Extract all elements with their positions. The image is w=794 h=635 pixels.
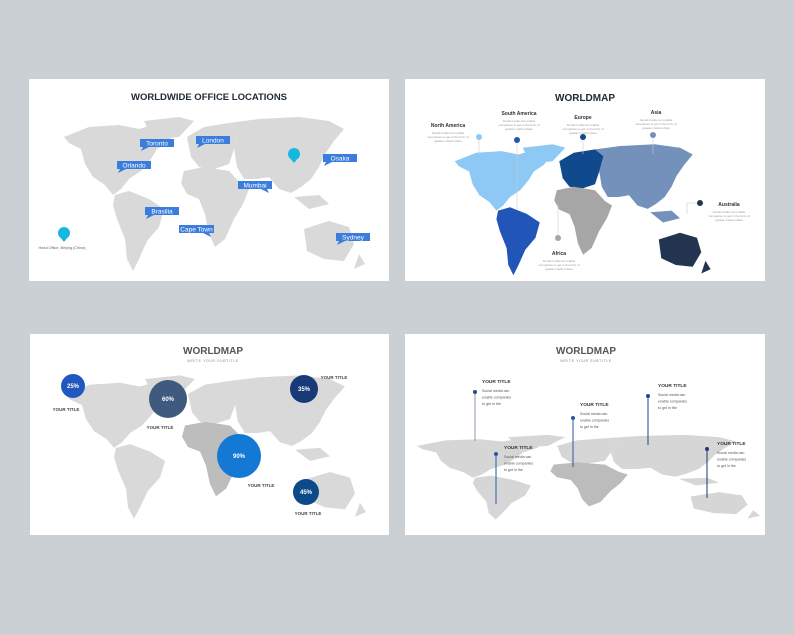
region descriptions: companies to get in the form of bbox=[427, 135, 469, 139]
gray world map bbox=[65, 375, 366, 519]
percentage circles bbox=[61, 374, 319, 505]
subtitle: WRITE YOUR SUBTITLE bbox=[187, 359, 239, 363]
pin titles bbox=[482, 379, 746, 451]
title: worldwide office locations: WORLDWIDE OFFICE LOCATIONS bbox=[131, 92, 287, 103]
pin descriptions: Social media can bbox=[482, 389, 509, 393]
pin descriptions: to get in the bbox=[658, 406, 677, 410]
pins bbox=[473, 390, 709, 504]
region descriptions: greater market share bbox=[642, 126, 670, 130]
region descriptions: companies to get in the form of bbox=[708, 214, 750, 218]
head office caption: Head Office, Beijing (China) bbox=[38, 246, 86, 250]
colored world map bbox=[455, 144, 711, 275]
pin descriptions: Social media can bbox=[580, 412, 607, 416]
pin descriptions: to get in the bbox=[580, 425, 599, 429]
office labels: Osaka bbox=[331, 156, 350, 162]
region descriptions: greater market share bbox=[715, 218, 743, 222]
office labels bbox=[117, 136, 370, 245]
region labels: Europe bbox=[574, 115, 592, 121]
pin descriptions: to get in the bbox=[504, 468, 523, 472]
region labels bbox=[431, 110, 740, 257]
region labels: South America bbox=[501, 111, 537, 117]
pin titles: YOUR TITLE bbox=[580, 402, 609, 408]
pin descriptions: enable companies bbox=[658, 400, 687, 404]
panel: worldmap percentages bbox=[30, 334, 389, 535]
region labels: Australia bbox=[718, 202, 740, 208]
region descriptions: Social media can enable bbox=[543, 259, 576, 263]
pin descriptions: to get in the bbox=[717, 464, 736, 468]
pin descriptions: enable companies bbox=[580, 418, 609, 422]
region descriptions: companies to get in the form of bbox=[562, 127, 604, 131]
office labels: Orlando bbox=[122, 162, 146, 170]
region descriptions: Social media can enable bbox=[503, 119, 536, 123]
pin titles: YOUR TITLE bbox=[482, 379, 511, 385]
pin descriptions: enable companies bbox=[717, 458, 746, 462]
office labels: London bbox=[202, 138, 224, 144]
office labels: Brasilia bbox=[151, 208, 173, 216]
panel: worldwide office locations bbox=[29, 79, 389, 281]
region labels: Africa bbox=[552, 251, 566, 257]
office labels: Sydney bbox=[342, 234, 365, 242]
region descriptions: Social media can enable bbox=[567, 123, 600, 127]
pin descriptions bbox=[482, 389, 746, 472]
pin descriptions: enable companies bbox=[482, 396, 511, 400]
title: WORLDMAP bbox=[183, 346, 243, 357]
region descriptions: greater market share bbox=[569, 131, 597, 135]
pin descriptions: Social media can bbox=[717, 451, 744, 455]
icon: beijing pin bbox=[288, 148, 300, 163]
region descriptions bbox=[427, 118, 750, 271]
region descriptions: greater market share bbox=[505, 127, 533, 131]
pin titles: YOUR TITLE bbox=[717, 441, 746, 447]
title: WORLDMAP bbox=[556, 346, 616, 357]
percentage circles: 90% bbox=[233, 454, 246, 460]
pin descriptions: Social media can bbox=[504, 455, 531, 459]
connector lines bbox=[479, 135, 700, 238]
region descriptions: companies to get in the form of bbox=[538, 263, 580, 267]
office labels: Cape Town bbox=[180, 226, 213, 234]
region descriptions: companies to get in the form of bbox=[635, 122, 677, 126]
panel: worldmap continents bbox=[405, 79, 765, 281]
region descriptions: Social media can enable bbox=[640, 118, 673, 122]
office labels: Mumbai bbox=[243, 182, 267, 190]
region dots bbox=[476, 132, 703, 241]
flat world map bbox=[417, 435, 760, 520]
pin descriptions: Social media can bbox=[658, 393, 685, 397]
region descriptions: Social media can enable bbox=[432, 131, 465, 135]
region descriptions: greater market share bbox=[434, 139, 462, 143]
pin titles: YOUR TITLE bbox=[504, 445, 533, 451]
percentage circles: 25% bbox=[67, 384, 80, 390]
circle titles: YOUR TITLE bbox=[53, 407, 79, 412]
percentage circles: 35% bbox=[298, 387, 311, 393]
region labels: North America bbox=[431, 123, 465, 129]
percentage circles: 45% bbox=[300, 490, 313, 496]
circle titles bbox=[53, 375, 347, 516]
percentage circles: 60% bbox=[162, 397, 175, 403]
title: WORLDMAP bbox=[555, 93, 615, 104]
circle titles: YOUR TITLE bbox=[321, 375, 347, 380]
region labels: Asia bbox=[651, 110, 661, 116]
world map gray bbox=[64, 117, 365, 271]
circle titles: YOUR TITLE bbox=[295, 511, 321, 516]
icon: head office pin bbox=[58, 227, 70, 242]
region descriptions: greater market share bbox=[545, 267, 573, 271]
circle titles: YOUR TITLE bbox=[147, 425, 173, 430]
circle titles: YOUR TITLE bbox=[248, 483, 274, 488]
pin descriptions: enable companies bbox=[504, 462, 533, 466]
office labels: Toronto bbox=[146, 140, 168, 148]
pin descriptions: to get in the bbox=[482, 402, 501, 406]
region descriptions: Social media can enable bbox=[713, 210, 746, 214]
pin titles: YOUR TITLE bbox=[658, 383, 687, 389]
region descriptions: companies to get in the form of bbox=[498, 123, 540, 127]
panel: worldmap pins bbox=[405, 334, 765, 535]
subtitle: WRITE YOUR SUBTITLE bbox=[560, 359, 612, 363]
